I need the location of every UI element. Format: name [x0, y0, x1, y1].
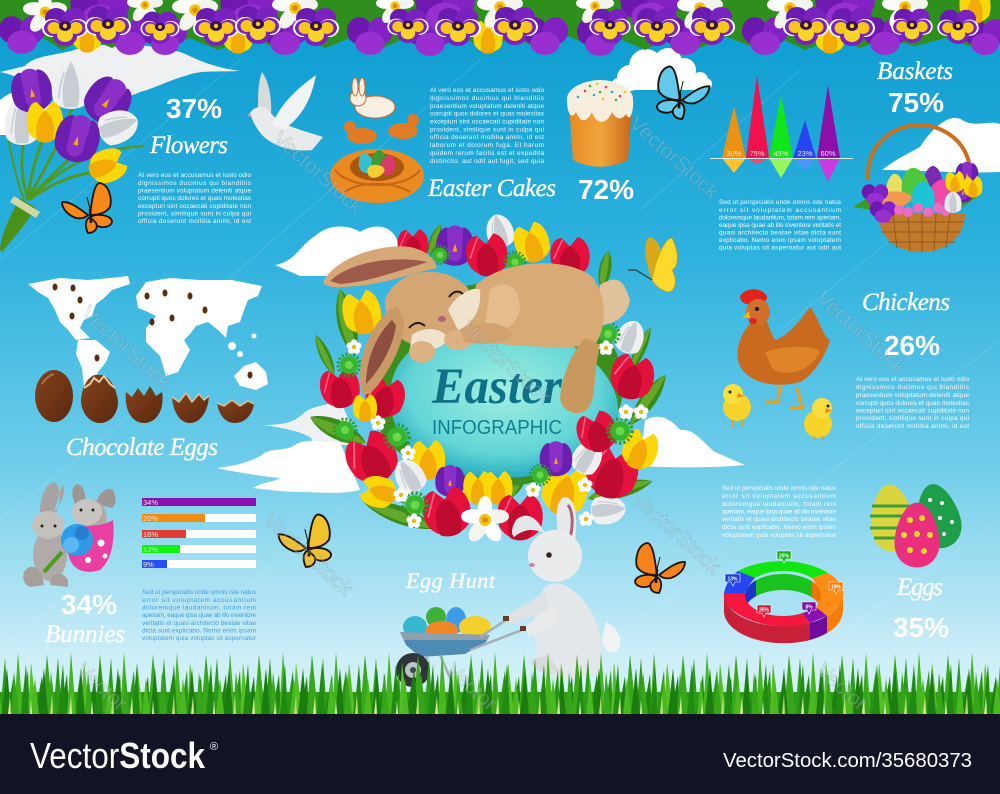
- icon: egg nest bread: [330, 149, 424, 203]
- wreath leaves: [306, 222, 672, 537]
- text block: easter cakes: quidem rerum facilis est et expedita: [430, 150, 544, 157]
- text block: bunnies: doloremque laudantium, totam rem: [142, 604, 256, 612]
- icon: butterfly orange: [62, 183, 112, 233]
- text block: flowers: dignissimos ducimus qui blanditiis: [138, 180, 251, 187]
- text block: eggs: dicta sunt explicabo. Nemo enim ipsam: [722, 524, 836, 531]
- text block: baskets: quia voluptas sit aspernatur aut odit aut: [719, 244, 841, 252]
- text block: baskets: quasi architecto beatae vitae dicta sunt: [719, 230, 841, 236]
- clouds: [0, 45, 1000, 493]
- text: VectorStock: [259, 509, 358, 601]
- text block: bunnies: Sed ut perspiciatis unde omnis iste natus: [142, 589, 256, 596]
- text block: flowers: provident, similique sunt in culpa qui: [138, 210, 251, 218]
- heading chickens: Chickens: [862, 289, 950, 316]
- text block: bunnies: aperiam, eaque ipsa quae ab illo inventore: [142, 612, 256, 619]
- text: VectorStock: [457, 317, 556, 409]
- text block: flowers: excepturi sint occaecati cupiditate non: [138, 203, 251, 210]
- easter egg: [390, 328, 618, 478]
- chart: triangle percentages: [710, 75, 853, 182]
- title easter: Easter: [431, 359, 563, 415]
- text block: baskets: eaque ipsa quae ab illo inventore veritatis et: [719, 222, 841, 229]
- text block: flowers: corrupti quos dolores et quas molestias: [138, 195, 251, 202]
- chart: triangle percentages: 23%: [797, 149, 813, 158]
- text block: bunnies: voluptatem quia voluptas sit aspernatur: [142, 635, 257, 642]
- chart: 3d donut: 13%: [727, 576, 738, 582]
- text: Vector: [442, 659, 501, 716]
- text: VectorStock: [269, 127, 368, 219]
- text block: eggs: veritatis et quasi architecto beatae vitae: [722, 516, 836, 523]
- text block: bunnies: error sit voluptatem accusantium: [142, 597, 256, 604]
- icon: butterfly yellow top: [628, 237, 677, 292]
- text block: bunnies: dicta sunt explicabo. Nemo enim ipsam: [142, 628, 256, 634]
- text block: flowers: At vero eos et accusamus et iusto odio: [138, 172, 251, 179]
- text block: easter cakes: dignissimos ducimus qui blanditiis: [430, 95, 544, 102]
- icon: chocolate eggs: [35, 370, 254, 423]
- icon: chicks: [723, 384, 832, 440]
- text: VectorStock: [77, 302, 176, 394]
- icon: bunny shaped bread: [350, 78, 395, 118]
- percent bunnies: 34%: [61, 589, 117, 620]
- text block: chickens: officia deserunt mollitia animi, id est: [856, 423, 969, 430]
- footer logo: VectorStock: [30, 735, 206, 776]
- icon: painted eggs: [868, 480, 966, 567]
- footer bar: [0, 714, 1000, 794]
- chart: horizontal bars: 12%: [143, 545, 158, 554]
- text block: flowers: officia deserunt mollitia animi, id est: [138, 218, 251, 225]
- text block: chickens: corrupti quos dolores et quas molestias: [856, 400, 969, 407]
- text: Vector: [72, 659, 131, 716]
- text block: chickens: excepturi sint occaecati cupiditate non: [856, 408, 969, 414]
- text block: eggs: voluptatem quia voluptas sit aspernatur: [722, 532, 837, 539]
- grass: [0, 648, 1000, 714]
- chart: horizontal bars: 20%: [143, 514, 158, 523]
- chart: horizontal bars: 34%: [143, 498, 158, 507]
- text block: easter cakes: [430, 87, 544, 165]
- text block: chickens: praesentium voluptatum deleniti atque: [856, 392, 969, 399]
- text block: easter cakes: distinctio. aut odit aut fugit, sed quia: [430, 158, 544, 165]
- text block: baskets: [719, 199, 841, 252]
- text block: flowers: [138, 172, 251, 225]
- heading chocolate eggs: Chocolate Eggs: [66, 434, 218, 461]
- icon: butterfly orange bottom: [635, 543, 685, 593]
- text block: baskets: Sed ut perspiciatis unde omnis iste natus: [719, 199, 841, 206]
- text block: bunnies: veritatis et quasi architecto beatae vitae: [142, 620, 256, 627]
- panel: flower garland: [0, 0, 1000, 56]
- text block: baskets: doloremque laudantium, totam rem aperiam,: [719, 214, 841, 222]
- icon: dove: [247, 72, 323, 150]
- icon: white bunny pushing wheelbarrow: [503, 497, 620, 679]
- chart: 3d donut: 8%: [805, 604, 813, 610]
- wreath flowers: [317, 211, 663, 545]
- text block: chickens: dignissimos ducimus qui blanditiis: [856, 384, 969, 391]
- text block: easter cakes: corrupti quos dolores et quas molestias: [430, 111, 544, 118]
- percent flowers: 37%: [166, 93, 222, 124]
- chart: 3d donut: 19%: [831, 584, 842, 590]
- text: VectorStock: [812, 287, 911, 379]
- footer id: VectorStock.com/35680373: [723, 750, 972, 772]
- percent eggs: 35%: [893, 612, 949, 643]
- chart: triangle percentages: 60%: [820, 149, 836, 158]
- text block: easter cakes: provident, similique sunt in culpa qui: [430, 126, 544, 133]
- icon: butterfly blue: [657, 66, 709, 119]
- chart: triangle percentages: 30%: [726, 149, 742, 158]
- heading eggs: Eggs: [896, 574, 943, 601]
- heading flowers: Flowers: [149, 132, 228, 159]
- text block: easter cakes: At vero eos et accusamus et iusto odio: [430, 87, 544, 94]
- icon: wheelbarrow with eggs: [396, 607, 522, 687]
- heading easter cakes: Easter Cakes: [427, 175, 556, 202]
- heading baskets: Baskets: [877, 58, 953, 85]
- text block: eggs: doloremque laudantium, totam rem: [722, 501, 836, 508]
- text: VectorStock: [625, 112, 724, 204]
- text block: easter cakes: laborum et dolorum fuga. Et harum: [430, 142, 544, 149]
- chart: horizontal bars: 9%: [143, 560, 154, 569]
- percent chickens: 26%: [884, 330, 940, 361]
- text block: eggs: aperiam, eaque ipsa quae ab illo inventore: [722, 508, 836, 516]
- icon: butterfly yellow bottom: [279, 514, 331, 567]
- text: VectorStock: [627, 487, 726, 579]
- icon: easter cake: [567, 80, 633, 167]
- text block: baskets: explicabo. Nemo enim ipsam voluptatem: [719, 237, 841, 244]
- icon: duck shaped breads: [344, 114, 419, 144]
- chart: triangle percentages: 45%: [773, 149, 789, 158]
- icon: hen: [737, 289, 830, 408]
- text block: easter cakes: officia deserunt mollitia animi, id est: [430, 134, 544, 141]
- text block: bunnies: [142, 589, 257, 642]
- heading egg hunt: Egg Hunt: [405, 568, 496, 593]
- icon: two bunnies with egg: [23, 483, 116, 587]
- text block: chickens: At vero eos et accusamus et iusto odio: [856, 376, 969, 383]
- heading bunnies: Bunnies: [45, 621, 125, 648]
- text block: chickens: [856, 376, 969, 430]
- percent baskets: 75%: [888, 87, 944, 118]
- text block: eggs: Sed ut perspiciatis unde omnis iste natus: [722, 485, 836, 492]
- text block: easter cakes: excepturi sint occaecati cupiditate non: [430, 118, 544, 126]
- icon: sleeping bunny: [323, 246, 630, 413]
- chart: 3d donut: 25%: [779, 554, 790, 560]
- text block: chickens: provident, similique sunt in culpa qui: [856, 415, 969, 422]
- icon: easter basket: [853, 125, 983, 252]
- chart: world map: [28, 276, 268, 390]
- text: Vector: [812, 659, 871, 716]
- chart: horizontal bars: [142, 498, 256, 569]
- text block: eggs: error sit voluptatem accusantium: [722, 493, 836, 500]
- chart: 3d donut: [724, 551, 843, 643]
- panel: central egg illustration: [306, 211, 672, 545]
- registered mark: ®: [210, 741, 218, 753]
- text block: easter cakes: praesentium voluptatum deleniti atque: [430, 103, 544, 110]
- percent easter cakes: 72%: [578, 174, 634, 205]
- icon: bouquet of flowers: [0, 61, 143, 252]
- chart: 3d donut: 35%: [759, 608, 770, 614]
- text block: eggs: [722, 485, 837, 539]
- chart: horizontal bars: 16%: [143, 530, 158, 539]
- text block: baskets: error sit voluptatem accusantium: [719, 207, 841, 214]
- text block: flowers: praesentium voluptatum deleniti atque: [138, 188, 251, 194]
- subtitle infographic: INFOGRAPHIC: [432, 417, 562, 439]
- chart: triangle percentages: 75%: [749, 149, 765, 158]
